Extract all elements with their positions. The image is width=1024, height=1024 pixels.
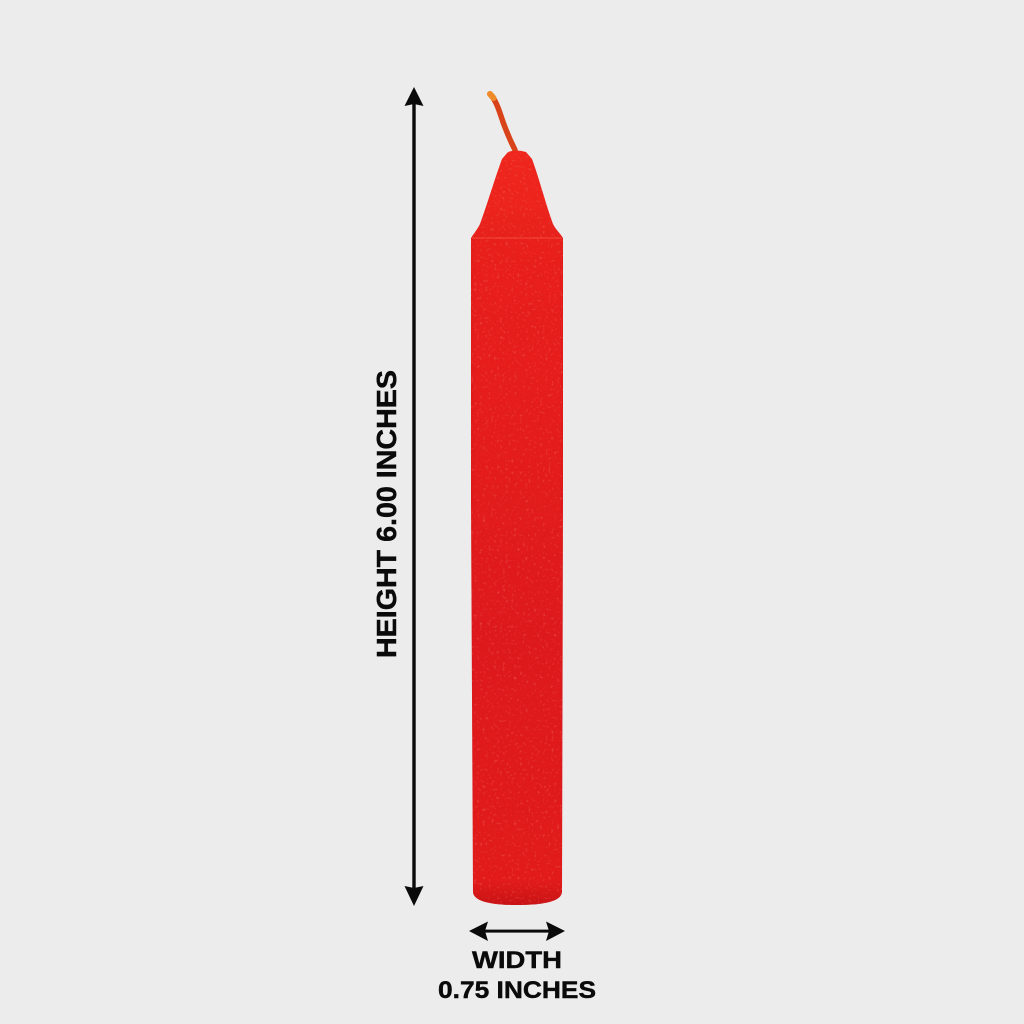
- candle: [471, 91, 563, 905]
- candle wick: [490, 94, 515, 150]
- width label: WIDTH: [472, 947, 562, 974]
- width dimension arrow: [469, 922, 565, 941]
- height label: HEIGHT 6.00 INCHES: [371, 370, 402, 658]
- height dimension arrow: [404, 87, 424, 906]
- candle wax body: [471, 150, 563, 905]
- width label: [438, 947, 596, 1004]
- width label: 0.75 INCHES: [438, 977, 596, 1004]
